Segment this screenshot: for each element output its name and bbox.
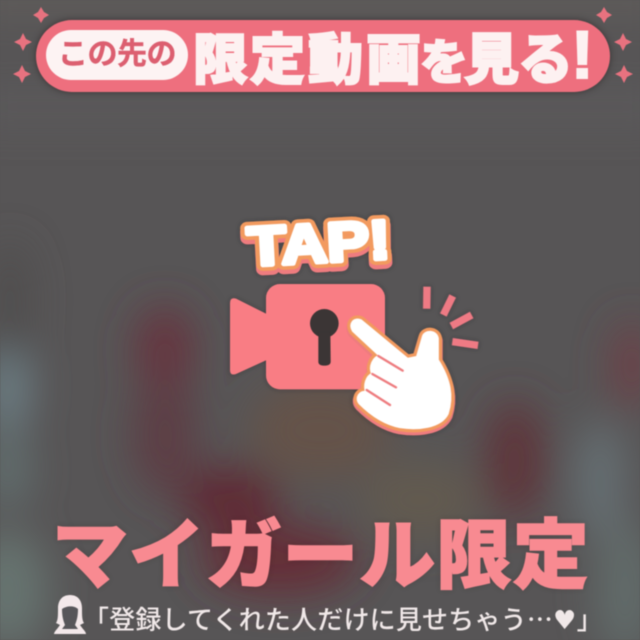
limited heading: マイガール限定 <box>52 494 590 604</box>
icon: girl silhouette <box>54 594 86 635</box>
banner badge: この先の: この先の <box>58 38 176 71</box>
banner heading: を <box>420 23 468 92</box>
quote caption: 「登録してくれた人だけに見せちゃう…♥」 <box>83 600 603 637</box>
tap motion lines <box>427 287 478 345</box>
tap illustration <box>230 208 479 436</box>
sparkles around banner <box>12 6 634 84</box>
banner badge: この先の <box>46 30 188 80</box>
video camera icon <box>230 284 385 389</box>
TAP label: TAP! <box>246 208 392 278</box>
banner heading <box>193 20 594 92</box>
keyhole <box>310 309 339 366</box>
banner <box>36 20 610 92</box>
TAP label: TAP! <box>246 208 392 278</box>
tapping hand <box>352 320 450 430</box>
TAP label: TAP! <box>246 212 392 282</box>
